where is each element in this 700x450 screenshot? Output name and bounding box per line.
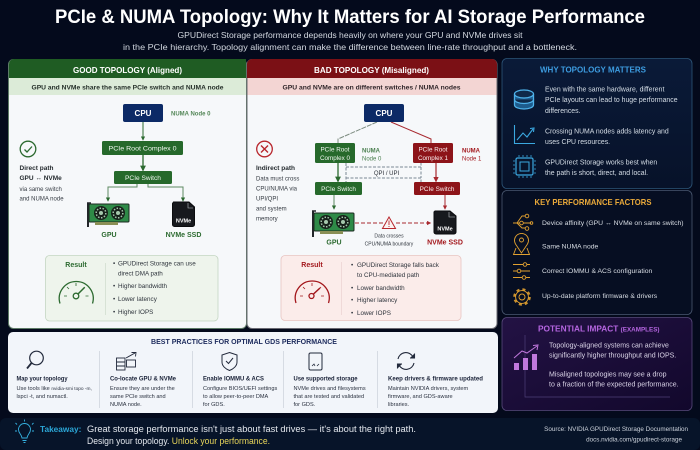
icon: gauge good [59,282,93,304]
result bullets: good: direct DMA path [118,270,163,278]
indirect path note: and system [256,206,287,212]
heading: BEST PRACTICES FOR OPTIMAL GDS PERFORMANCE [151,337,337,346]
indirect path note: Indirect path [256,165,295,172]
result: good: Result [65,262,87,269]
text: source [544,426,688,444]
icon: gauge bad [295,281,329,303]
text: GDS: GPUDirect Storage works best when [545,160,657,166]
dashed boundary arrow [355,222,430,224]
result: bad [281,256,461,320]
text: NUMA [545,128,669,146]
label: GPU: GPU [326,240,342,246]
result: bad: Result [301,262,323,269]
text: hardware: PCIe layouts can lead to huge performance [545,97,678,104]
panel: why topology matters [502,58,692,188]
icon: NVMe drive [434,211,456,234]
indirect path note: CPU/NUMA via [256,186,298,192]
CPU node: CPU [376,109,393,118]
result bullets: bad [351,262,440,317]
icon: warning triangle [382,217,396,228]
practice: storage: that are tested and validated [294,394,364,400]
practice: drivers [388,353,483,408]
icon: GPU [312,210,354,237]
practice: drivers: Maintain NVIDIA drivers, system [388,386,469,392]
switch 1 [414,182,460,195]
label: NVMe SSD: NVMe SSD [166,232,201,239]
NUMA node 1 label: Node 1 [462,156,482,162]
PCIe switch [114,171,172,184]
PCIe switch: PCIe Switch [125,175,161,182]
text: hardware: Even with the same hardware, different [545,86,664,94]
text: misaligned impact: Misaligned topologies may see a drop [549,372,667,378]
icon: line chart [514,125,535,144]
result bullets: good: • [113,283,115,290]
direct path note: Direct path [20,165,53,172]
NUMA node label: NUMA Node 0 [171,112,211,118]
text: takeaway: Design your topology. Unlock your performance. [87,436,270,446]
practice: co-locate: NUMA node. [110,402,142,408]
icon: sliders [513,263,530,279]
practice: co-locate: Co-locate GPU & NVMe [110,376,177,382]
indirect path note: Data must cross [256,176,299,182]
practice: co-locate [110,352,177,408]
icon: database [514,90,534,109]
text: takeaway: Takeaway: [40,424,81,434]
switch 0: PCIe Switch [321,186,356,193]
practice: drivers: firmware, and GDS-aware [388,394,453,400]
heading: POTENTIAL IMPACT (EXAMPLES) [538,324,660,334]
subheading: bad topology: GPU and NVMe are on different switches / NUMA nodes [282,84,461,92]
panel: best practices [8,332,498,413]
practice: storage: for GDS. [294,402,316,408]
text: aligned impact [549,342,676,360]
direct path note: via same switch [20,187,62,193]
boundary caption [365,234,414,248]
result bullets: good: GPUDirect Storage can use [118,260,196,268]
indirect path note: memory [256,216,278,222]
practice: drivers: Keep drivers & firmware updated [388,376,483,382]
direct path note: GPU ↔ NVMe [20,175,62,182]
panel: potential impact [502,318,692,410]
result bullets: good: Lower latency [118,296,158,303]
result bullets: good: Higher bandwidth [118,283,168,290]
NUMA node 0 label: Node 0 [362,156,382,162]
result bullets: bad: • [351,310,353,317]
text: source: Source: NVIDIA GPUDirect Storage Documentation [544,426,688,433]
text: hardware: differences. [545,108,581,115]
root complex 1: Complex 1 [418,155,449,162]
NUMA node 1 label [462,148,482,162]
result bullets: bad: Lower bandwidth [357,285,405,292]
icon: NVMe drive [172,202,194,226]
switch 0 [315,182,362,195]
practice: drivers: libraries. [388,402,410,408]
title: PCIe & NUMA Topology: Why It Matters for AI Storage Performance [55,6,645,28]
subheading: good topology: GPU and NVMe share the same PCIe switch and NUMA node [32,84,224,92]
result bullets: good: • [113,260,115,268]
root complex 1 [413,143,453,163]
result bullets: good [113,260,196,316]
boundary caption: Data crosses [374,234,404,240]
practice: IOMMU [203,352,278,408]
practice: IOMMU: to allow peer-to-peer DMA [203,394,269,400]
NUMA node 0 label [362,148,382,162]
subtitle: GPUDirect Storage performance depends heavily on where your GPU and NVMe drives sit [178,30,523,40]
root complex 0: PCIe Root [320,146,350,154]
text: device affinity: Device affinity (GPU ↔ NVMe on same switch) [542,220,684,227]
practice: map topology: Map your topology [16,376,68,382]
practice: storage [294,353,366,408]
good path connectors [108,122,183,201]
result bullets: bad: Lower IOPS [357,310,391,317]
heading: bad topology: BAD TOPOLOGY (Misaligned) [314,65,429,75]
text: aligned impact: Topology-aligned systems can achieve [549,342,669,350]
icon: NVMe drive: NVMe [437,226,453,232]
practice: storage: NVMe drives and filesystems [294,386,366,392]
indirect path note [256,141,299,222]
root complex 1: PCIe Root [418,146,448,154]
direct path note: and NUMA node [20,196,64,202]
icon: chip [513,155,536,178]
practice: co-locate: Ensure they are under the [110,386,175,392]
heading: KEY PERFORMANCE FACTORS [534,197,652,207]
text: misaligned impact: to a fraction of the expected performance. [549,382,679,388]
QPI/UPI label: QPI / UPI [374,171,400,177]
CPU node [364,104,404,122]
PCIe root complex: PCIe Root Complex 0 [108,146,177,152]
icon: bar growth [514,345,538,370]
result bullets: bad: to CPU-mediated path [357,272,420,279]
root complex 0: Complex 0 [320,155,351,162]
text: NUMA: uses CPU resources. [545,139,610,146]
practice: storage: Use supported storage [294,376,358,382]
result bullets: bad: GPUDirect Storage falls back [357,262,440,269]
text: GDS: the path is short, direct, and local. [545,170,648,177]
heading: WHY TOPOLOGY MATTERS [540,64,646,74]
text: takeaway [40,424,416,446]
result bullets: bad: • [351,297,353,304]
result bullets: good: Higher IOPS [118,309,153,316]
CPU node [123,104,163,122]
root complex 0 [315,143,355,163]
result: good [46,256,218,321]
label: GPU: GPU [101,232,117,239]
subtitle: in the PCIe hierarchy. Topology alignment can make the difference between line-rate throughput and a bottleneck. [123,42,577,52]
text: takeaway: Great storage performance isn't just about fast drives — it's about the right path. [87,424,416,434]
bad path connectors [334,122,445,209]
text: NUMA node: Same NUMA node [542,244,599,250]
text: NUMA: Crossing NUMA nodes adds latency and [545,128,669,136]
icon: location [514,233,530,254]
switch 1: PCIe Switch [420,186,455,193]
text: aligned impact: significantly higher throughput and IOPS. [549,352,676,360]
practice: IOMMU: Enable IOMMU & ACS [203,376,264,382]
heading: good topology: GOOD TOPOLOGY (Aligned) [73,65,182,75]
subtitle [123,30,577,52]
result bullets: bad: • [351,285,353,292]
PCIe root complex [102,141,183,155]
text: firmware: Up-to-date platform firmware & drivers [542,293,658,300]
text: hardware [545,86,678,115]
label: NVMe SSD: NVMe SSD [427,240,463,246]
practice: map topology: lspci -t, and numactl. [16,394,68,400]
text: source: docs.nvidia.com/gpudirect-storage [586,436,682,444]
icon: gear [514,289,530,305]
panel: takeaway [0,418,700,450]
boundary caption: CPU/NUMA boundary [365,242,414,248]
practice: IOMMU: Configure BIOS/UEFI settings [203,386,278,392]
CPU node: CPU [135,109,152,118]
text: misaligned impact [549,372,679,388]
NUMA node 1 label: NUMA [462,148,481,154]
result bullets: bad: • [351,262,353,269]
practice: IOMMU: for GDS. [203,402,225,408]
icon: network [513,214,533,230]
result bullets: bad: Higher latency [357,297,398,304]
panel: key performance factors [502,190,692,314]
practice: co-locate: same PCIe switch and [110,394,166,400]
text: IOMMU: Correct IOMMU & ACS configuration [542,268,653,275]
practice: map topology [16,351,92,400]
text: GDS [545,160,657,177]
NUMA node 0 label: NUMA [362,148,381,154]
icon: NVMe drive: NVMe [176,218,191,224]
result bullets: good: • [113,296,115,303]
practice: map topology: Use tools like nvidia-smi topo -m, [16,386,92,392]
icon: light bulb [15,420,34,442]
direct path note [20,141,64,202]
result bullets: good: • [113,309,115,316]
indirect path note: UPI/QPI [256,196,278,202]
icon: GPU [87,202,129,227]
